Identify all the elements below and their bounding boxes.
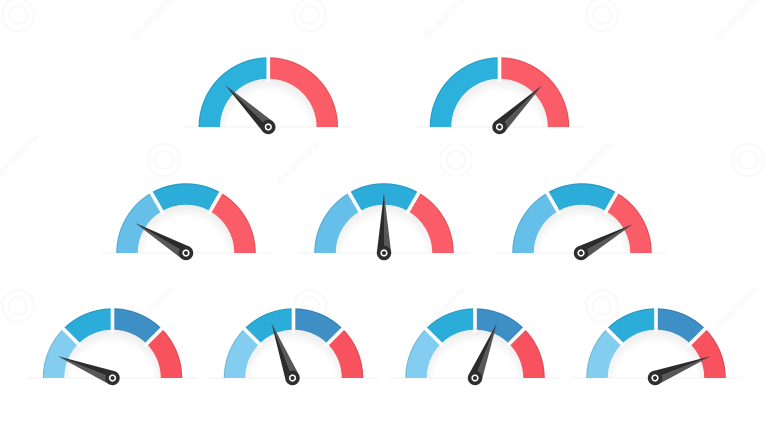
gauge 1: two segments, needle left [183,54,353,137]
watermark text: dreamstime [567,138,616,187]
needle [571,218,636,263]
gauge 5: three segments, needle right [497,184,667,263]
gauge 6: four segments, needle far left [28,305,198,387]
needle [55,349,122,387]
needle [377,193,391,260]
needle [646,349,713,387]
gauge 8: four segments, needle right of centre [390,305,560,387]
needle [132,217,196,263]
gauge 4: three segments, needle centre [299,184,469,260]
watermark pattern [2,0,764,322]
gauge 7: four segments, needle left of centre [208,305,378,387]
watermark text: dreamstime [275,138,324,187]
needle [489,80,547,137]
needle [220,80,278,137]
needle [265,320,302,387]
needle [466,321,504,387]
watermark text [0,0,762,332]
watermark text: dreamstime [713,283,762,332]
gauge 2: two segments, needle right [414,54,584,137]
watermark text: dreamstime [421,283,470,332]
gauge 9: four segments, needle far right [571,305,741,387]
watermark text: dreamstime [129,283,178,332]
gauge 3: three segments, needle left [101,184,271,263]
